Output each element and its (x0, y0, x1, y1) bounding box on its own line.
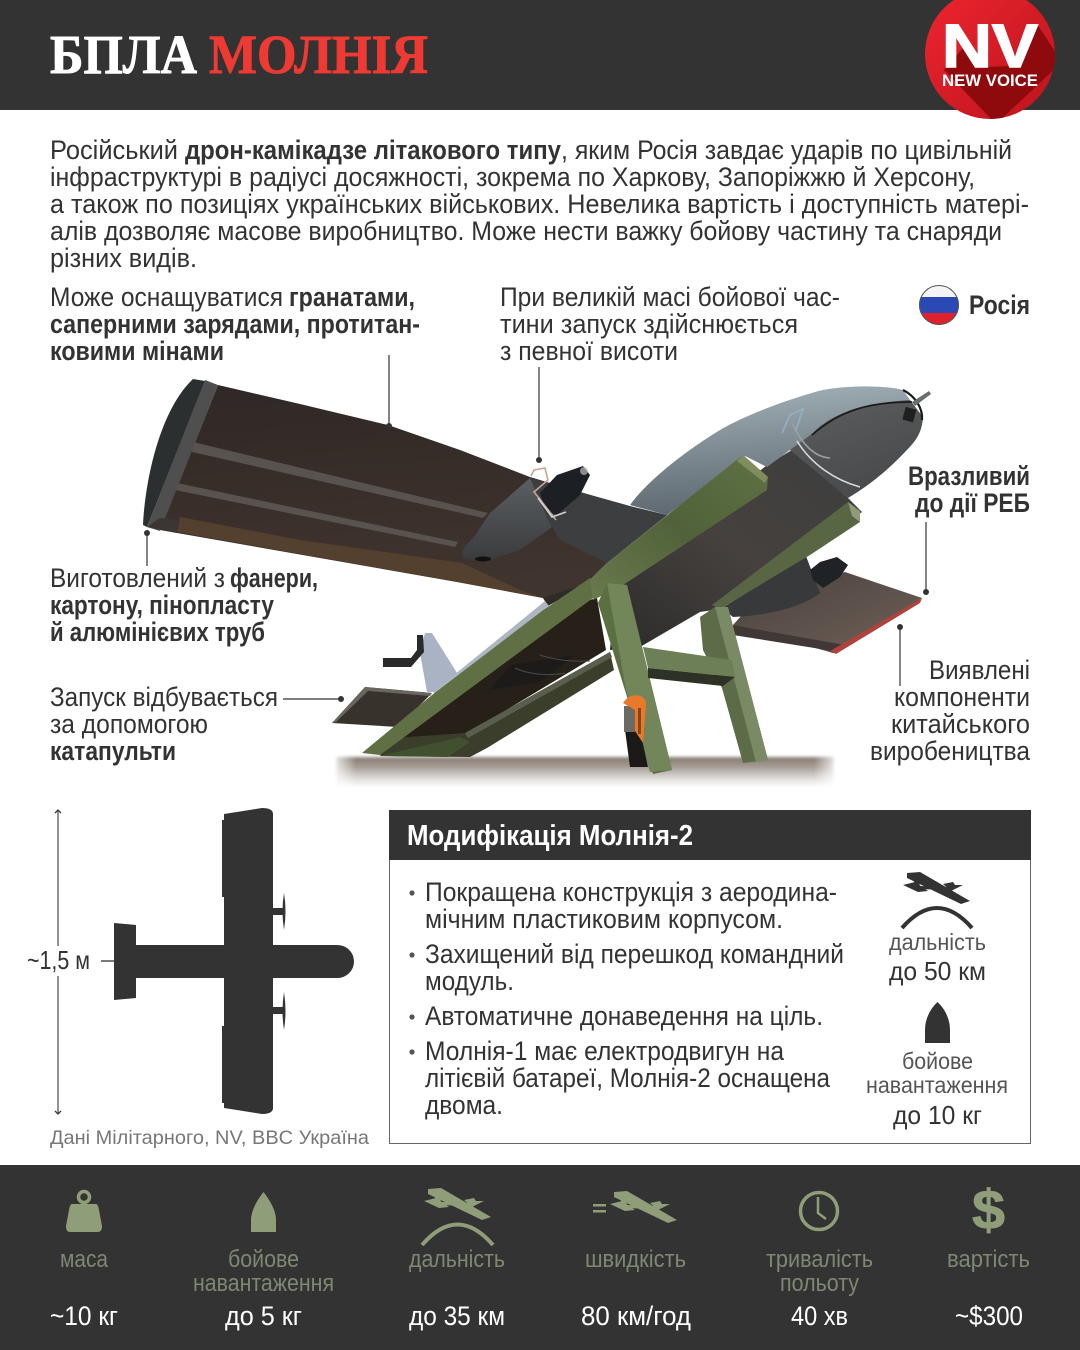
panel heading: Модифікація Молнія-2 (407, 820, 693, 852)
crossbar (643, 647, 735, 677)
logo: NV New Voice: NEW VOICE (942, 72, 1038, 90)
annotation: catapult launch (50, 682, 278, 766)
intro text: , яким Росія завдає ударів по цивільній (561, 135, 1012, 165)
stat: payload: навантаження (193, 1270, 334, 1297)
bullet list: модуль. (425, 966, 514, 996)
orange clip (625, 730, 648, 767)
payload label: до 10 кг (893, 1100, 982, 1130)
annotation: chinese components: виробеництва (870, 736, 1030, 766)
stat: flight time: польоту (780, 1270, 859, 1297)
stat: mass: маса (60, 1246, 109, 1273)
payload label: бойове (902, 1048, 973, 1074)
stat: cost: $ (972, 1178, 1005, 1241)
right nacelle (722, 556, 820, 617)
bullet list: літієвій батареї, Молнія-2 оснащена (425, 1063, 830, 1093)
intro text: різних видів. (50, 243, 197, 273)
callout: vulnerable to EW: до дії РЕБ (915, 488, 1030, 518)
drone silhouette (114, 808, 354, 1114)
country: Russia flag: Росія (969, 290, 1030, 320)
source: Дані Мілітарного, NV, BBC Україна (50, 1127, 369, 1149)
stat: speed: швидкість (585, 1246, 686, 1273)
upper rail (590, 455, 768, 600)
annotation: materials (50, 563, 318, 647)
bullet list: Покращена конструкція з аеродина- (425, 877, 837, 907)
tail (332, 633, 457, 727)
fuselage strip (433, 601, 549, 697)
annotation: materials: й алюмінієвих труб (50, 617, 265, 647)
annotation: materials: фанери, (230, 563, 318, 593)
intro text: дрон-камікадзе літакового типу (185, 135, 561, 165)
callout: vulnerable to EW: Вразливий (908, 461, 1030, 491)
panel: Modification Molnia-2 (389, 810, 1031, 1144)
stat: flight time: 40 хв (791, 1301, 848, 1331)
panel: bottom stats (0, 1165, 1080, 1350)
dimension arrow and label (27, 810, 114, 1114)
leg 2 (700, 607, 768, 763)
icon: warhead (925, 1002, 950, 1043)
logo: NV New Voice (925, 0, 1062, 124)
bullet list (409, 877, 844, 1120)
range label: дальність (889, 929, 986, 955)
annotation: launch altitude: з певної висоти (500, 336, 678, 366)
annotation: launch altitude: При великій масі бойової час- (500, 282, 840, 312)
country: Russia flag (919, 285, 1030, 325)
stat: range (409, 1188, 505, 1331)
fuselage (610, 386, 931, 650)
rail B (712, 502, 860, 609)
bullet list: мічним пластиковим корпусом. (425, 904, 783, 934)
intro text: інфраструктурі в радіусі досяжності, зокрема по Харкову, Запоріжжю й Херсону, (50, 162, 975, 192)
title: БПЛА (50, 24, 197, 85)
title (50, 24, 428, 85)
panel heading (389, 810, 1031, 860)
range label (889, 929, 986, 986)
annotation: materials: Виготовлений з (50, 563, 225, 593)
header band (0, 0, 1080, 110)
bullet list: Автоматичне донаведення на ціль. (425, 1001, 823, 1031)
callout: vulnerable to EW (908, 461, 1030, 518)
intro text (50, 135, 1029, 273)
left nacelle and motor (462, 466, 667, 563)
intro text: Російський (50, 135, 178, 165)
lower inner rail (380, 652, 614, 757)
drone photo illustration (143, 379, 931, 790)
stat: cost: вартість (947, 1246, 1030, 1273)
title: МОЛНІЯ (209, 24, 428, 85)
right wing (722, 556, 922, 654)
range label: до 50 км (889, 956, 986, 986)
payload label (866, 1048, 1008, 1130)
stat: flight time (766, 1192, 873, 1331)
annotation: munitions (50, 282, 420, 366)
bullet list: Молнія-1 має електродвигун на (425, 1036, 784, 1066)
intro text: а також по позиціях українських військових. Невелика вартість і доступність матері- (50, 189, 1029, 219)
annotation: munitions: гранатами, (289, 282, 415, 312)
stat: mass: ~10 кг (50, 1301, 118, 1331)
stat: flight time: тривалість (766, 1246, 873, 1273)
payload label: навантаження (866, 1072, 1008, 1098)
stat: payload: до 5 кг (225, 1301, 302, 1331)
stat: range: дальність (409, 1246, 505, 1273)
lower interior (380, 598, 606, 755)
ground (330, 752, 840, 790)
stat: payload: бойове (228, 1246, 299, 1273)
left wing (143, 379, 667, 606)
annotation: munitions: саперними зарядами, протитан- (50, 309, 420, 339)
intro text: алів дозволяє масове виробництво. Може нести важку бойову частину та снаряди (50, 216, 1002, 246)
annotation: catapult launch: Запуск відбувається (50, 682, 278, 712)
annotation: chinese components (870, 655, 1030, 766)
logo: NV New Voice: NV (942, 12, 1038, 80)
leader lines (144, 355, 929, 702)
stat: speed (581, 1191, 691, 1331)
annotation: chinese components: китайського (891, 709, 1030, 739)
annotation: launch altitude (500, 282, 840, 366)
leg 1 (598, 583, 672, 774)
annotation: catapult launch: катапульти (50, 736, 176, 766)
bullet list: Захищений від перешкод командний (425, 939, 844, 969)
stat: payload (193, 1192, 334, 1331)
annotation: munitions: ковими мінами (50, 336, 224, 366)
catapult (362, 455, 860, 774)
dimension arrow and label: ~1,5 м (27, 945, 90, 975)
stat: cost: ~$300 (955, 1301, 1023, 1331)
stat: cost (947, 1178, 1030, 1331)
annotation: chinese components: компоненти (894, 682, 1030, 712)
stat: range: до 35 км (409, 1301, 505, 1331)
annotation: catapult launch: за допомогою (50, 709, 208, 739)
stat: mass (50, 1192, 118, 1331)
annotation: launch altitude: тини запуск здійснюється (500, 309, 798, 339)
stat: speed: 80 км/год (581, 1301, 691, 1331)
bullet list: двома. (425, 1090, 503, 1120)
annotation: materials: картону, пінопласту (50, 590, 274, 620)
icon: range drone (902, 872, 972, 928)
outer lower rail (362, 578, 607, 755)
annotation: munitions: Може оснащуватися (50, 282, 283, 312)
annotation: chinese components: Виявлені (929, 655, 1030, 685)
